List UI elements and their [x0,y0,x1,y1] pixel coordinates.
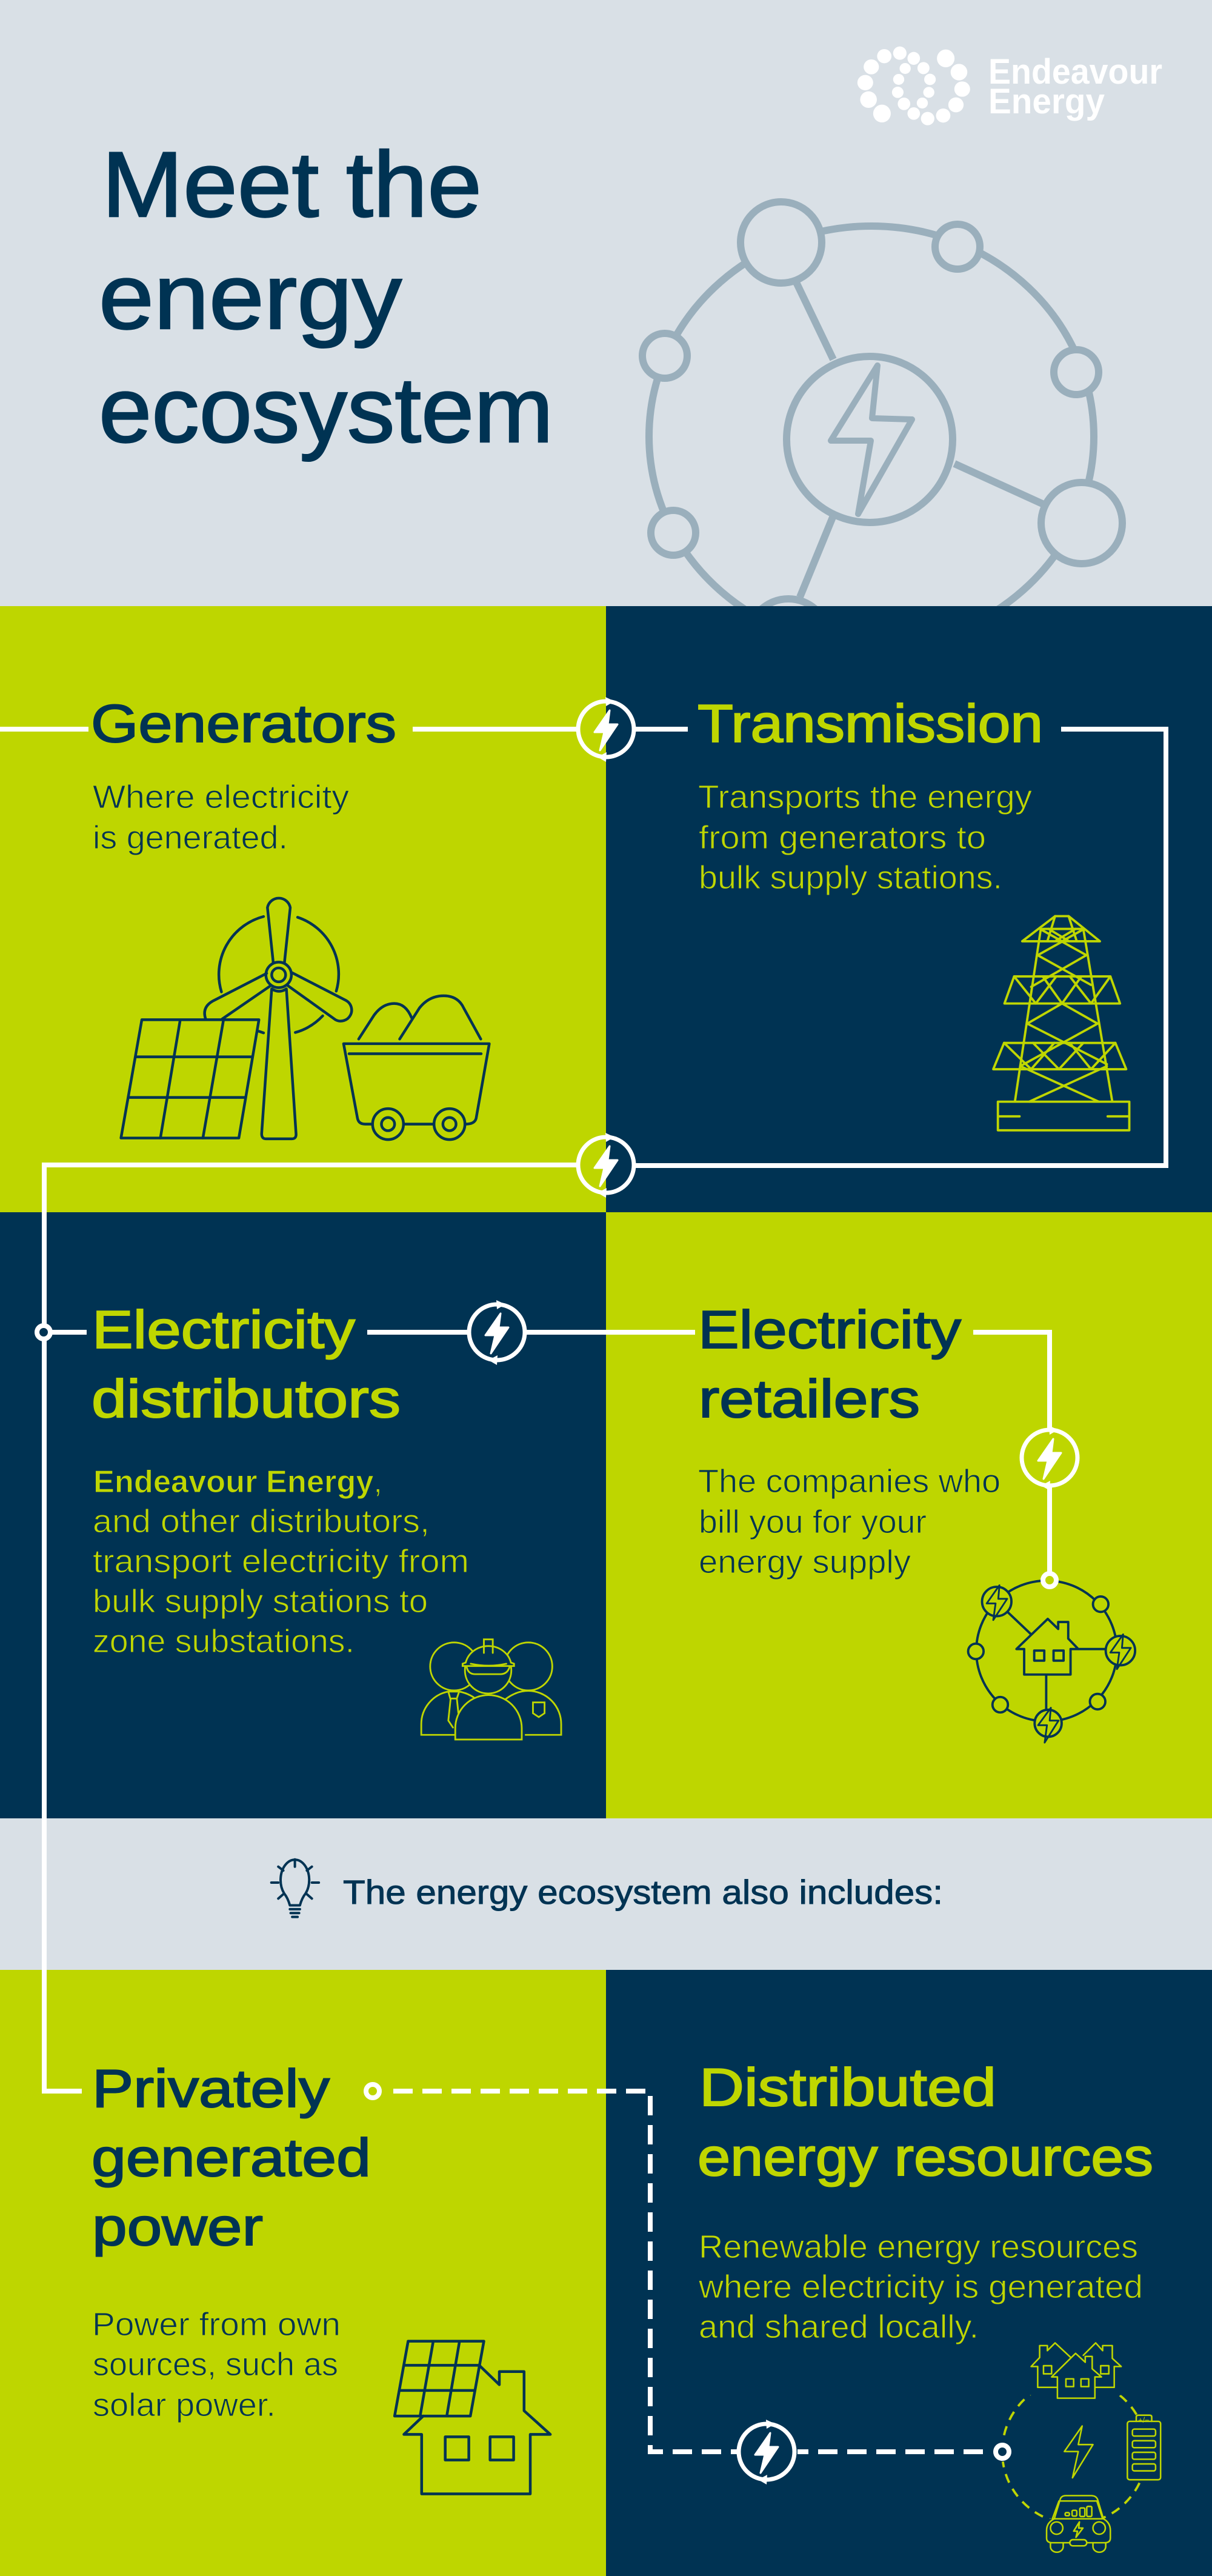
heading: Distributed energy resources: Distributed [699,2057,996,2117]
panel: generators background [0,606,606,1212]
connector dot: privately generated power [366,2084,379,2098]
panel: distributed energy resources background [606,1970,1212,2576]
icon: solar panel, wind turbine and coal cart [121,898,489,1140]
heading: Privately generated power [92,2058,371,2257]
panel: also includes band [0,1818,1212,1970]
heading: Electricity retailers [698,1300,961,1429]
text: privately generated description: solar power. [93,2387,276,2423]
text: retailers description: bill you for your [699,1504,927,1540]
section: distributed energy resources text [698,2057,1153,2345]
icon: energy symbol between generators and transmission [578,697,634,762]
text: transmission description: bulk supply stations. [699,859,1002,896]
text: also includes: The energy ecosystem also includes: [343,1873,943,1911]
connector: main flow lines [0,729,1166,2091]
icon: energy symbol on dashed line [739,2420,794,2484]
heading: Privately generated power: power [92,2197,263,2257]
text: generators description [93,779,349,856]
title: Meet the [102,133,482,236]
icon: light bulb [271,1860,319,1917]
connector dot: distributors [37,1326,50,1339]
heading: Distributed energy resources: energy resources [698,2127,1153,2187]
text: transmission description: Transports the energy [698,779,1032,815]
text: distributors description [93,1464,469,1660]
title: energy [99,245,402,349]
title [99,133,553,462]
panel: retailers background [606,1212,1212,1818]
icon: house with solar panel [395,2341,550,2494]
text: distributors description: bulk supply stations to [93,1583,428,1620]
text: transmission description: from generators to [699,819,986,856]
text: distributors description: Endeavour Energy, [93,1464,382,1500]
heading: Transmission: Transmission [698,693,1043,753]
icon: three workers [421,1640,561,1740]
icon: distributed energy circle with houses, battery and car: +/− [1138,2415,1150,2424]
text: distributed energy description: Renewable energy resources [699,2229,1138,2265]
heading: Generators: Generators [91,693,396,753]
text: generators description: Where electricity [93,779,349,815]
icon: energy network illustration [639,198,1126,606]
section: electricity distributors text [92,1300,469,1660]
heading: Electricity distributors: distributors [92,1369,401,1429]
section: generators text [91,693,396,856]
heading: Electricity retailers: Electricity [698,1300,961,1360]
heading: Distributed energy resources [698,2057,1153,2187]
section: transmission text [698,693,1043,896]
text: distributed energy description: and shared locally. [699,2309,979,2345]
text: distributors description: and other distributors, [93,1503,430,1540]
text: distributed energy description [698,2229,1143,2345]
text: privately generated description [92,2306,341,2423]
text: generators description: is generated. [93,819,288,856]
panel: header background [0,0,1212,606]
connector: dashed flow lines [393,2091,983,2452]
logo wordmark [988,52,1162,121]
text: retailers description: energy supply [699,1544,911,1580]
heading: Electricity distributors [92,1300,401,1429]
panel: privately generated power background [0,1970,606,2576]
text: privately generated description: sources, such as [93,2346,338,2383]
icon: energy symbol above retailers network [1022,1426,1077,1490]
heading: Electricity distributors: Electricity [92,1300,355,1360]
text: distributed energy description: where electricity is generated [698,2269,1143,2305]
section: privately generated power text [92,2058,371,2423]
title: ecosystem [99,358,553,462]
icon: transmission tower [993,916,1130,1130]
heading: Privately generated power: generated [92,2127,371,2187]
panel: distributors background [0,1212,606,1818]
logo wordmark: Endeavour [988,52,1162,92]
logo mark dots [857,47,970,125]
logo wordmark: Energy [988,82,1105,121]
section: electricity retailers text [698,1300,1001,1580]
icon: distributed energy circle with houses, battery and car [992,2343,1160,2552]
text: privately generated description: Power from own [92,2306,341,2343]
connector dot: retailers network [1043,1573,1056,1587]
icon: energy symbol between transmission and distributors [578,1133,634,1198]
text: retailers description: The companies who [698,1463,1001,1500]
icon: home energy network [968,1581,1135,1743]
panel: transmission background [606,606,1212,1212]
callout: the energy ecosystem also includes [271,1860,943,1917]
heading: Privately generated power: Privately [92,2058,330,2118]
heading: Electricity retailers: retailers [699,1369,920,1429]
text: transmission description [698,779,1032,896]
text: distributors description: zone substations. [93,1623,355,1660]
icon: energy symbol between distributors and retailers [469,1300,525,1365]
connector dot: distributed energy resources [996,2445,1009,2458]
text: distributors description: transport electricity from [93,1543,469,1580]
logo: Endeavour Energy [857,47,1162,125]
text: retailers description [698,1463,1001,1580]
